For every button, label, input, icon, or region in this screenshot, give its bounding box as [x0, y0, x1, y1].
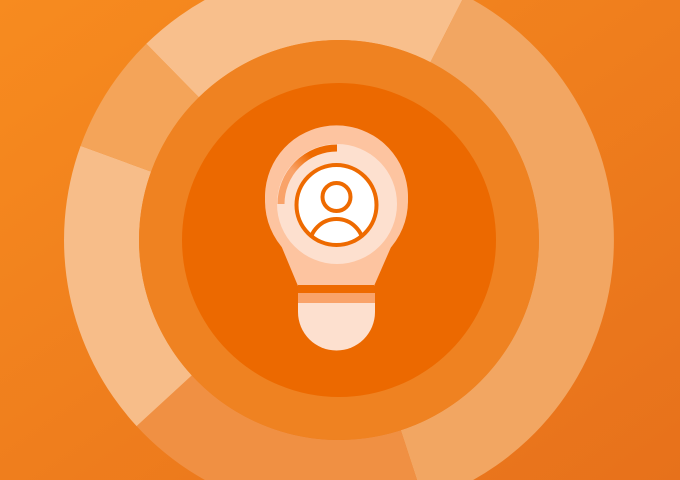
bulb base	[298, 303, 375, 350]
icon: person	[294, 163, 378, 247]
segment bottom	[137, 375, 424, 480]
bulb body	[265, 125, 408, 286]
collar dark line	[298, 285, 374, 293]
icon: lightbulb	[265, 125, 408, 350]
bulb inner light circle	[277, 144, 397, 264]
segment right	[401, 0, 614, 480]
progress arc	[281, 148, 337, 204]
middle ring	[139, 40, 539, 440]
segment left	[64, 146, 192, 426]
inner circle	[182, 83, 496, 397]
segment upper left	[81, 44, 199, 172]
collar band	[298, 293, 375, 303]
segment top	[146, 0, 465, 97]
